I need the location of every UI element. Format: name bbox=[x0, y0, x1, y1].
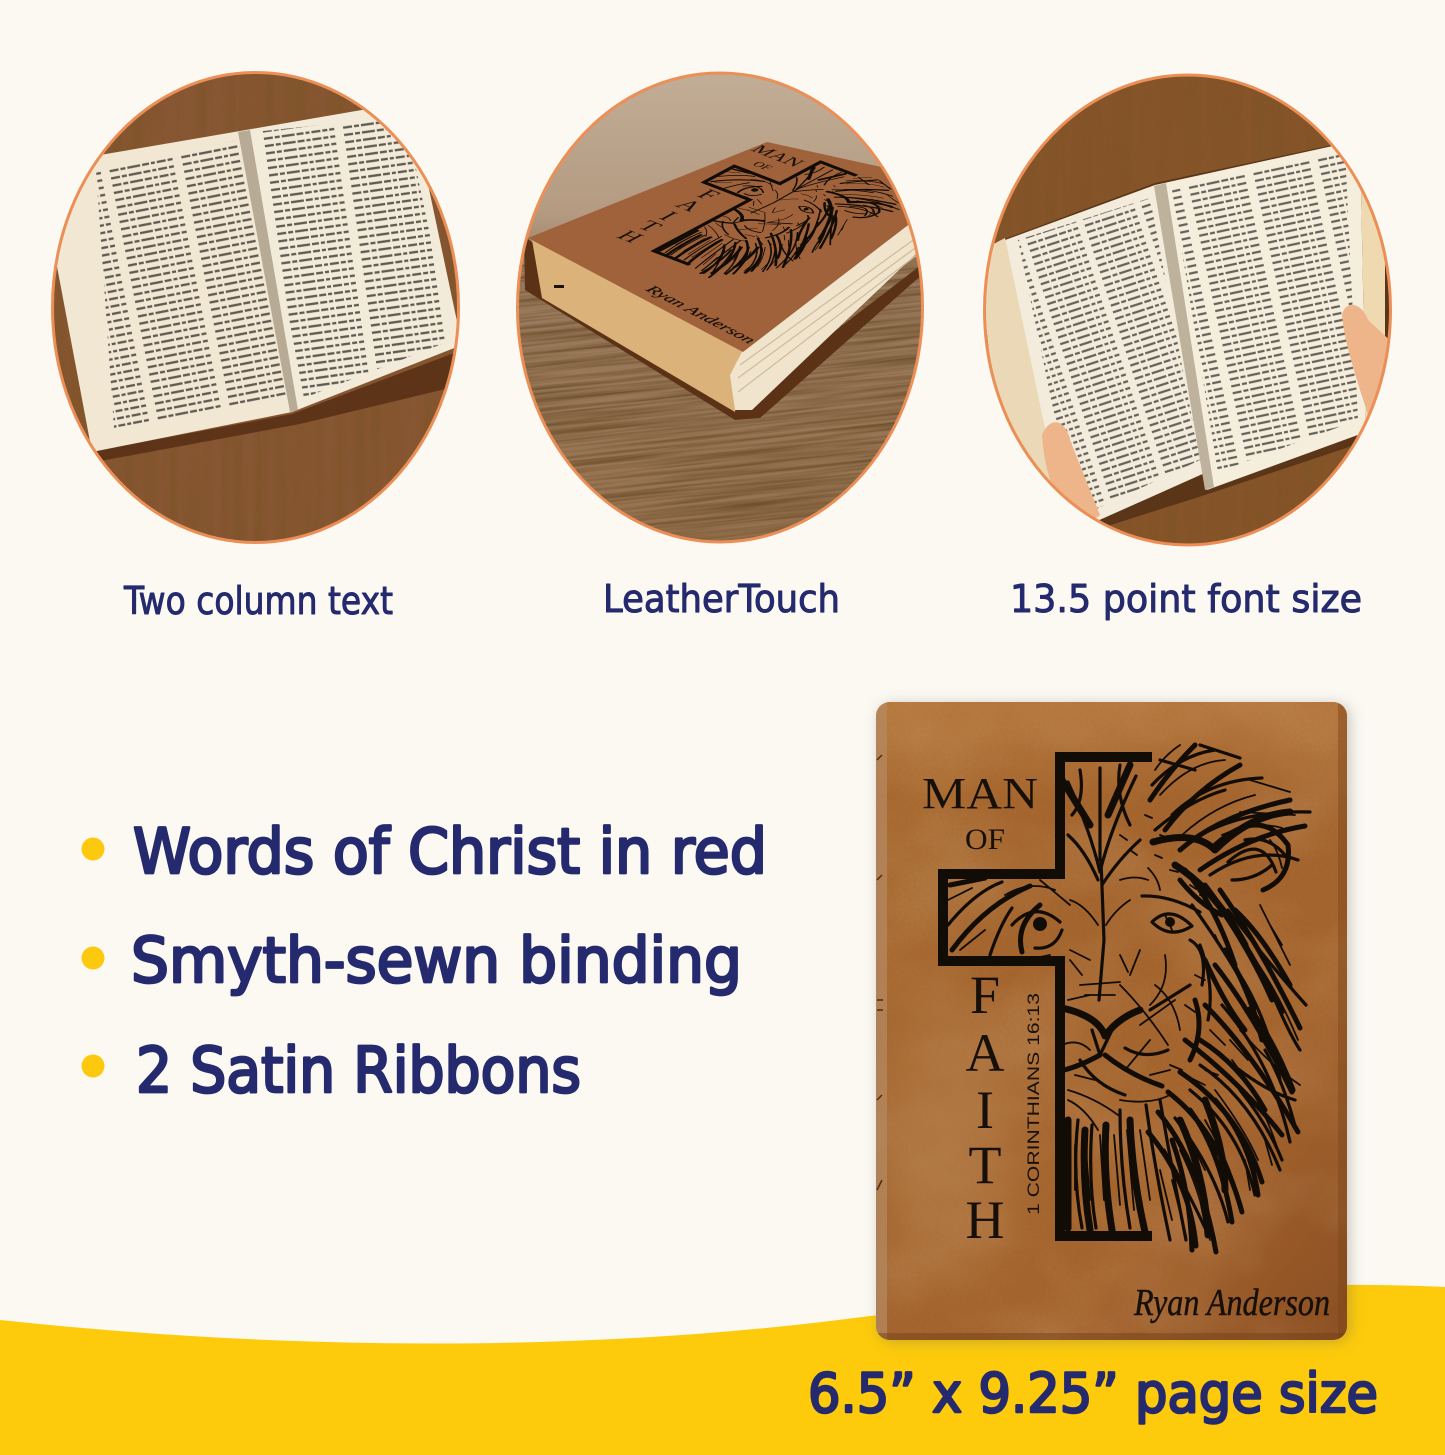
icon: left hand bbox=[1042, 422, 1100, 518]
photo circle: leathertouch cover bbox=[516, 72, 924, 544]
verse reference: 1 CORINTHIANS 16:13 bbox=[1024, 993, 1043, 1215]
title: faith vertical letters: T bbox=[968, 1135, 1002, 1195]
caption: leathertouch: LeatherTouch bbox=[603, 577, 840, 621]
book cover face: T bbox=[631, 218, 667, 235]
photo circle: font size bbox=[975, 73, 1395, 548]
book cover face: Ryan Anderson bbox=[641, 283, 759, 346]
icon: ribbon slot bbox=[554, 285, 564, 288]
book cover face: OF bbox=[749, 160, 776, 172]
caption: font size: 13.5 point font size bbox=[1010, 577, 1362, 621]
book cover face: H bbox=[610, 228, 649, 246]
bullet list of features bbox=[82, 815, 767, 1107]
personalised name: Ryan Anderson bbox=[1133, 1282, 1330, 1324]
title: man: MAN bbox=[922, 769, 1038, 818]
title: faith vertical letters: A bbox=[966, 1023, 1004, 1083]
bullet dot three bbox=[82, 1054, 104, 1078]
title: faith vertical letters: H bbox=[966, 1190, 1004, 1250]
title: faith vertical letters: I bbox=[976, 1080, 994, 1140]
book cover face: A bbox=[669, 197, 708, 215]
feature: words of christ: Words of Christ in red bbox=[133, 815, 767, 888]
book cover face: F bbox=[691, 187, 725, 203]
title: faith vertical letters: F bbox=[970, 965, 1000, 1025]
lion and cross engraving bbox=[943, 745, 1310, 1252]
page size label: 6.5” x 9.25” page size bbox=[808, 1362, 1378, 1425]
yellow wave footer bbox=[0, 1285, 1445, 1455]
caption: two column text: Two column text bbox=[123, 579, 393, 623]
bullet dot one bbox=[82, 838, 104, 860]
book cover face bbox=[528, 142, 922, 352]
feature: ribbons: 2 Satin Ribbons bbox=[136, 1034, 581, 1107]
feature: binding: Smyth-sewn binding bbox=[131, 924, 742, 997]
book cover face: I bbox=[653, 209, 683, 224]
main book cover bbox=[876, 702, 1347, 1340]
book cover face: MAN bbox=[746, 143, 809, 170]
icon: right hand bbox=[1342, 305, 1388, 414]
bullet dot two bbox=[82, 946, 104, 970]
title: faith vertical letters bbox=[966, 965, 1004, 1250]
photo circle: two column text bbox=[50, 70, 462, 545]
title: of: OF bbox=[965, 823, 1005, 856]
